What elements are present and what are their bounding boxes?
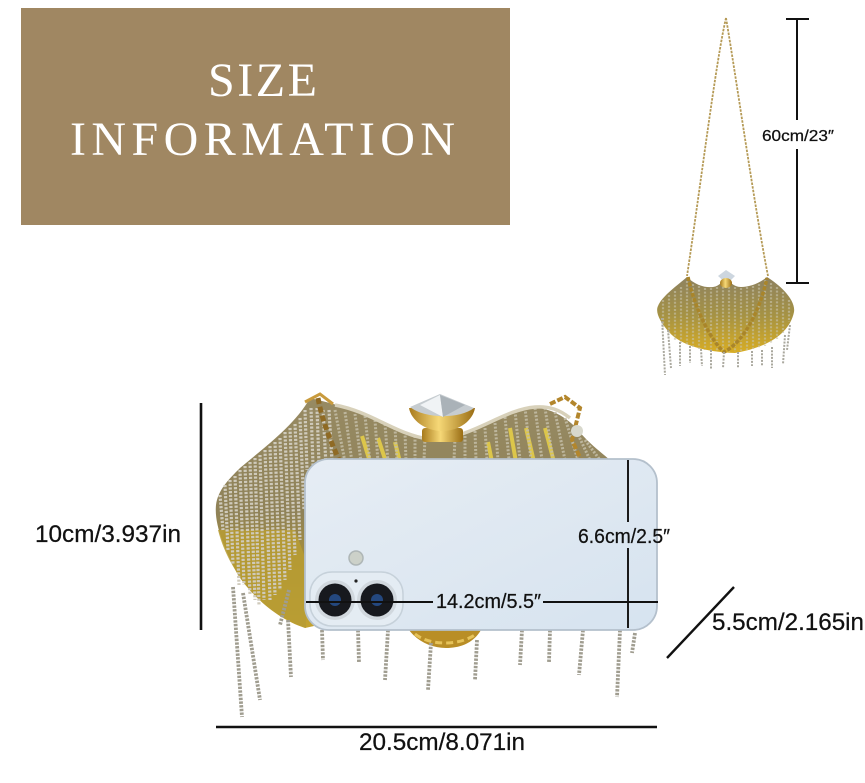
chain left xyxy=(318,398,340,462)
bag body xyxy=(216,398,612,628)
camera module xyxy=(310,572,403,626)
gold stripes in top band xyxy=(362,428,554,462)
title panel xyxy=(21,8,510,225)
tassels xyxy=(233,587,635,717)
gold lower left xyxy=(218,530,306,628)
chain xyxy=(687,18,768,276)
dimension: phone height: 6.6cm/2.5″ xyxy=(578,526,670,548)
small bag with chain xyxy=(657,18,794,375)
clasp knob xyxy=(409,394,475,442)
dimension: bag depth: 5.5cm/2.165in xyxy=(712,609,864,636)
dimension: bag height: 10cm/3.937in xyxy=(35,521,181,548)
title xyxy=(70,54,455,166)
title: INFORMATION xyxy=(70,113,455,166)
dimension: strap length xyxy=(762,19,834,283)
dimension: phone width: 14.2cm/5.5″ xyxy=(436,591,541,613)
dimension: strap length: 60cm/23″ xyxy=(762,128,834,145)
phone flash xyxy=(349,551,363,565)
dimension: bag width: 20.5cm/8.071in xyxy=(359,729,525,756)
small bag chain drape xyxy=(688,277,767,352)
chain right xyxy=(550,397,582,462)
lower chain xyxy=(409,630,481,648)
title: SIZE xyxy=(208,54,317,107)
small bag clasp xyxy=(718,270,735,288)
large bag xyxy=(216,394,635,717)
rhinestone top band xyxy=(335,408,600,462)
phone xyxy=(305,459,657,630)
small bag body xyxy=(657,277,794,353)
dimension: bag depth xyxy=(667,587,864,658)
rhinestone left strands xyxy=(220,408,332,605)
small bag tassels xyxy=(662,318,790,375)
